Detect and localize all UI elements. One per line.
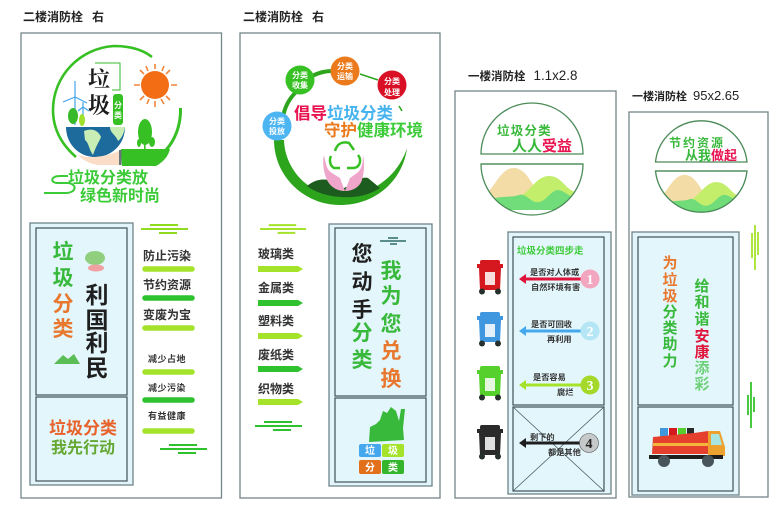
logo title: 垃圾: 圾	[88, 93, 110, 118]
step: 分类运输: 分类	[337, 61, 353, 71]
panel 1 outline	[21, 33, 222, 498]
logo: green living circle	[44, 46, 181, 205]
vertical slogan: 您动手分类: 手	[352, 299, 372, 322]
vertical slogan: 我为您兑换: 换	[380, 368, 402, 391]
step 3: 腐烂	[557, 387, 573, 397]
logo slogan: 垃圾分类放	[68, 168, 148, 187]
logo slogan: 绿色新时尚	[80, 186, 160, 205]
step 4: 都是其他	[548, 447, 581, 457]
vertical slogan: 我为您兑换: 您	[380, 313, 402, 336]
step 1: 1	[586, 273, 594, 288]
step 4	[519, 432, 598, 457]
vertical slogan: 给和谐安康添彩: 谐	[694, 311, 710, 328]
vertical slogan: 给和谐安康添彩: 给	[694, 277, 710, 295]
benefit list	[141, 225, 207, 453]
category list: 废纸类	[258, 347, 294, 362]
vertical slogan: 我为您兑换: 兑	[380, 340, 402, 363]
tiles: 垃圾分类: 类	[388, 461, 398, 474]
hills	[307, 178, 380, 197]
tiles: 垃圾分类	[359, 444, 404, 474]
step 2: 2	[586, 325, 594, 340]
icon: green silhouette	[369, 407, 405, 442]
vertical slogan: 您动手分类	[352, 243, 372, 372]
step: 分类处理: 分类	[384, 76, 400, 86]
icon: garbage truck	[649, 428, 725, 467]
vertical slogan: 为垃圾分类助力: 为	[662, 255, 678, 272]
panel 2 outline	[240, 33, 440, 498]
step 1: 是否对人体或	[530, 267, 579, 277]
panel: second-floor hydrant right	[240, 9, 440, 498]
emblem slogan: 节约资源	[669, 135, 725, 150]
emblem slogan	[497, 123, 572, 155]
badge: round emblem	[481, 103, 583, 215]
vertical slogan: 垃圾分类: 圾	[52, 267, 74, 290]
icon: sun	[134, 64, 177, 107]
step: 分类收集: 收集	[292, 80, 308, 90]
vertical slogan: 垃圾分类	[52, 240, 74, 341]
step 3	[519, 372, 600, 397]
step: 分类运输: 运输	[337, 71, 353, 81]
logo slogan	[294, 103, 423, 140]
step 2	[519, 319, 600, 344]
emblem slogan: 人人受益	[512, 137, 572, 155]
step: 分类投放: 分类	[269, 116, 285, 126]
logo: recycling process ring	[262, 56, 423, 205]
benefit list: 有益健康	[148, 410, 186, 421]
vertical slogan: 利国利民: 利	[86, 330, 108, 356]
step: 分类收集	[286, 66, 314, 94]
step: 分类投放	[262, 112, 292, 140]
logo slogan	[44, 168, 160, 205]
logo title: 垃圾	[88, 63, 120, 118]
vertical slogan: 您动手分类: 动	[352, 271, 372, 294]
category list: 织物类	[258, 381, 294, 396]
category list: 玻璃类	[258, 246, 294, 261]
lower slogan: 我先行动	[51, 438, 115, 457]
vertical slogan: 您动手分类: 分	[352, 322, 372, 345]
step: 分类运输	[330, 56, 360, 86]
vertical slogan: 利国利民: 民	[86, 355, 108, 381]
icons: sorting bins	[477, 260, 503, 460]
category list: 金属类	[258, 280, 294, 295]
vertical slogan: 给和谐安康添彩: 康	[694, 343, 710, 361]
icon: recycle symbol	[330, 142, 360, 168]
benefit list: 变废为宝	[143, 307, 191, 322]
step: 分类处理: 处理	[384, 87, 400, 97]
tiles: 垃圾分类: 圾	[388, 445, 398, 457]
emblem slogan: 垃圾分类	[497, 123, 552, 138]
vertical slogan: 为垃圾分类助力: 力	[662, 353, 678, 370]
logo slogan: 倡导垃圾分类	[294, 103, 394, 123]
vertical slogan: 给和谐安康添彩: 彩	[694, 376, 710, 393]
panel 2 heading: 二楼消防栓 右	[243, 9, 324, 24]
benefit list: 节约资源	[143, 277, 191, 292]
logo title: 垃圾: 垃	[88, 67, 110, 92]
logo slogan: 守护健康环境	[324, 120, 423, 140]
benefit list: 减少占地	[148, 353, 186, 364]
vertical slogan: 为垃圾分类助力: 圾	[662, 288, 678, 305]
badge: round emblem	[656, 121, 747, 213]
step 1	[519, 267, 600, 292]
decoration top	[260, 225, 306, 233]
tiles: 垃圾分类: 垃	[365, 444, 375, 457]
logo tag: 分类: 类	[114, 110, 122, 120]
board frame with vertical slogan	[329, 224, 432, 486]
board frame with vertical slogan	[632, 232, 739, 495]
step: 分类投放: 投放	[269, 126, 285, 136]
tiles: 垃圾分类: 分	[365, 461, 375, 474]
vertical slogan: 垃圾分类: 垃	[52, 240, 74, 264]
icon: small badge	[85, 251, 105, 272]
icon: cupped hands	[323, 155, 364, 191]
board frame with vertical slogan	[30, 223, 133, 485]
icon: ground and trees	[119, 119, 170, 166]
board frame with four steps	[508, 232, 611, 494]
benefit list: 防止污染	[143, 248, 191, 263]
benefit list: 减少污染	[148, 382, 186, 393]
step 1: 自然环境有害	[531, 282, 580, 292]
step 4: 剩下的	[530, 432, 555, 442]
vertical slogan: 给和谐安康添彩: 添	[694, 360, 710, 377]
vertical slogan: 我为您兑换: 我	[380, 260, 402, 283]
icon: green hills	[54, 354, 80, 364]
decoration bottom	[255, 422, 302, 430]
vertical slogan: 给和谐安康添彩	[694, 277, 710, 393]
vertical slogan: 为垃圾分类助力	[662, 255, 678, 370]
panel 3 heading: 一楼消防栓 1.1x2.8	[468, 68, 577, 83]
icon: globe	[66, 127, 125, 157]
icon: wind turbines	[63, 81, 89, 126]
emblem slogan	[669, 135, 737, 163]
vertical slogan: 我为您兑换	[380, 260, 402, 391]
vertical slogan: 我为您兑换: 为	[380, 285, 402, 308]
category list: 塑料类	[258, 313, 294, 328]
logo tag: 分类	[113, 94, 123, 125]
icon: hand	[78, 151, 119, 165]
decoration top	[141, 225, 188, 233]
decoration bottom	[160, 445, 207, 453]
vertical slogan: 垃圾分类: 类	[52, 318, 74, 341]
step: 分类收集: 分类	[292, 70, 308, 80]
lower slogan	[49, 418, 117, 457]
step 2: 是否可回收	[531, 319, 572, 329]
vertical slogan: 您动手分类: 类	[352, 349, 372, 372]
panel 3 outline	[455, 91, 616, 498]
lower slogan: 垃圾分类	[49, 418, 117, 438]
vertical slogan: 给和谐安康添彩: 安	[694, 328, 710, 345]
vertical slogan: 为垃圾分类助力: 垃	[662, 271, 678, 289]
panel 4 heading: 一楼消防栓 95x2.65	[632, 88, 739, 103]
vertical slogan: 为垃圾分类助力: 类	[662, 320, 678, 337]
steps heading: 垃圾分类四步走	[517, 245, 584, 257]
vertical slogan: 为垃圾分类助力: 分	[662, 304, 678, 321]
step 2: 再利用	[547, 334, 572, 344]
panel 4 outline	[629, 112, 768, 497]
vertical slogan: 给和谐安康添彩: 和	[694, 294, 710, 311]
emblem slogan: 从我做起	[685, 148, 737, 163]
panel 1 heading: 二楼消防栓 右	[23, 9, 104, 24]
panel: second-floor hydrant left	[21, 9, 222, 498]
category list	[255, 225, 306, 430]
vertical slogan: 您动手分类: 您	[352, 243, 372, 266]
step 4: 4	[586, 437, 592, 452]
step 3: 是否容易	[533, 372, 566, 382]
vertical slogan: 利国利民	[86, 282, 108, 381]
vertical slogan: 垃圾分类: 分	[52, 293, 74, 316]
decoration: vertical lime cloud	[752, 225, 758, 270]
vertical slogan: 利国利民: 利	[86, 282, 108, 308]
vertical slogan: 利国利民: 国	[86, 307, 108, 333]
decoration: vertical green cloud	[748, 382, 754, 428]
logo tag: 分类: 分	[114, 100, 122, 110]
step: 分类处理	[378, 70, 406, 100]
panel: first-floor hydrant 1.1x2.8	[455, 68, 616, 498]
vertical slogan: 为垃圾分类助力: 助	[662, 336, 678, 353]
panel: first-floor hydrant 95x2.65	[629, 88, 768, 497]
decoration: dark cloud	[380, 238, 406, 244]
step 3: 3	[586, 379, 594, 394]
